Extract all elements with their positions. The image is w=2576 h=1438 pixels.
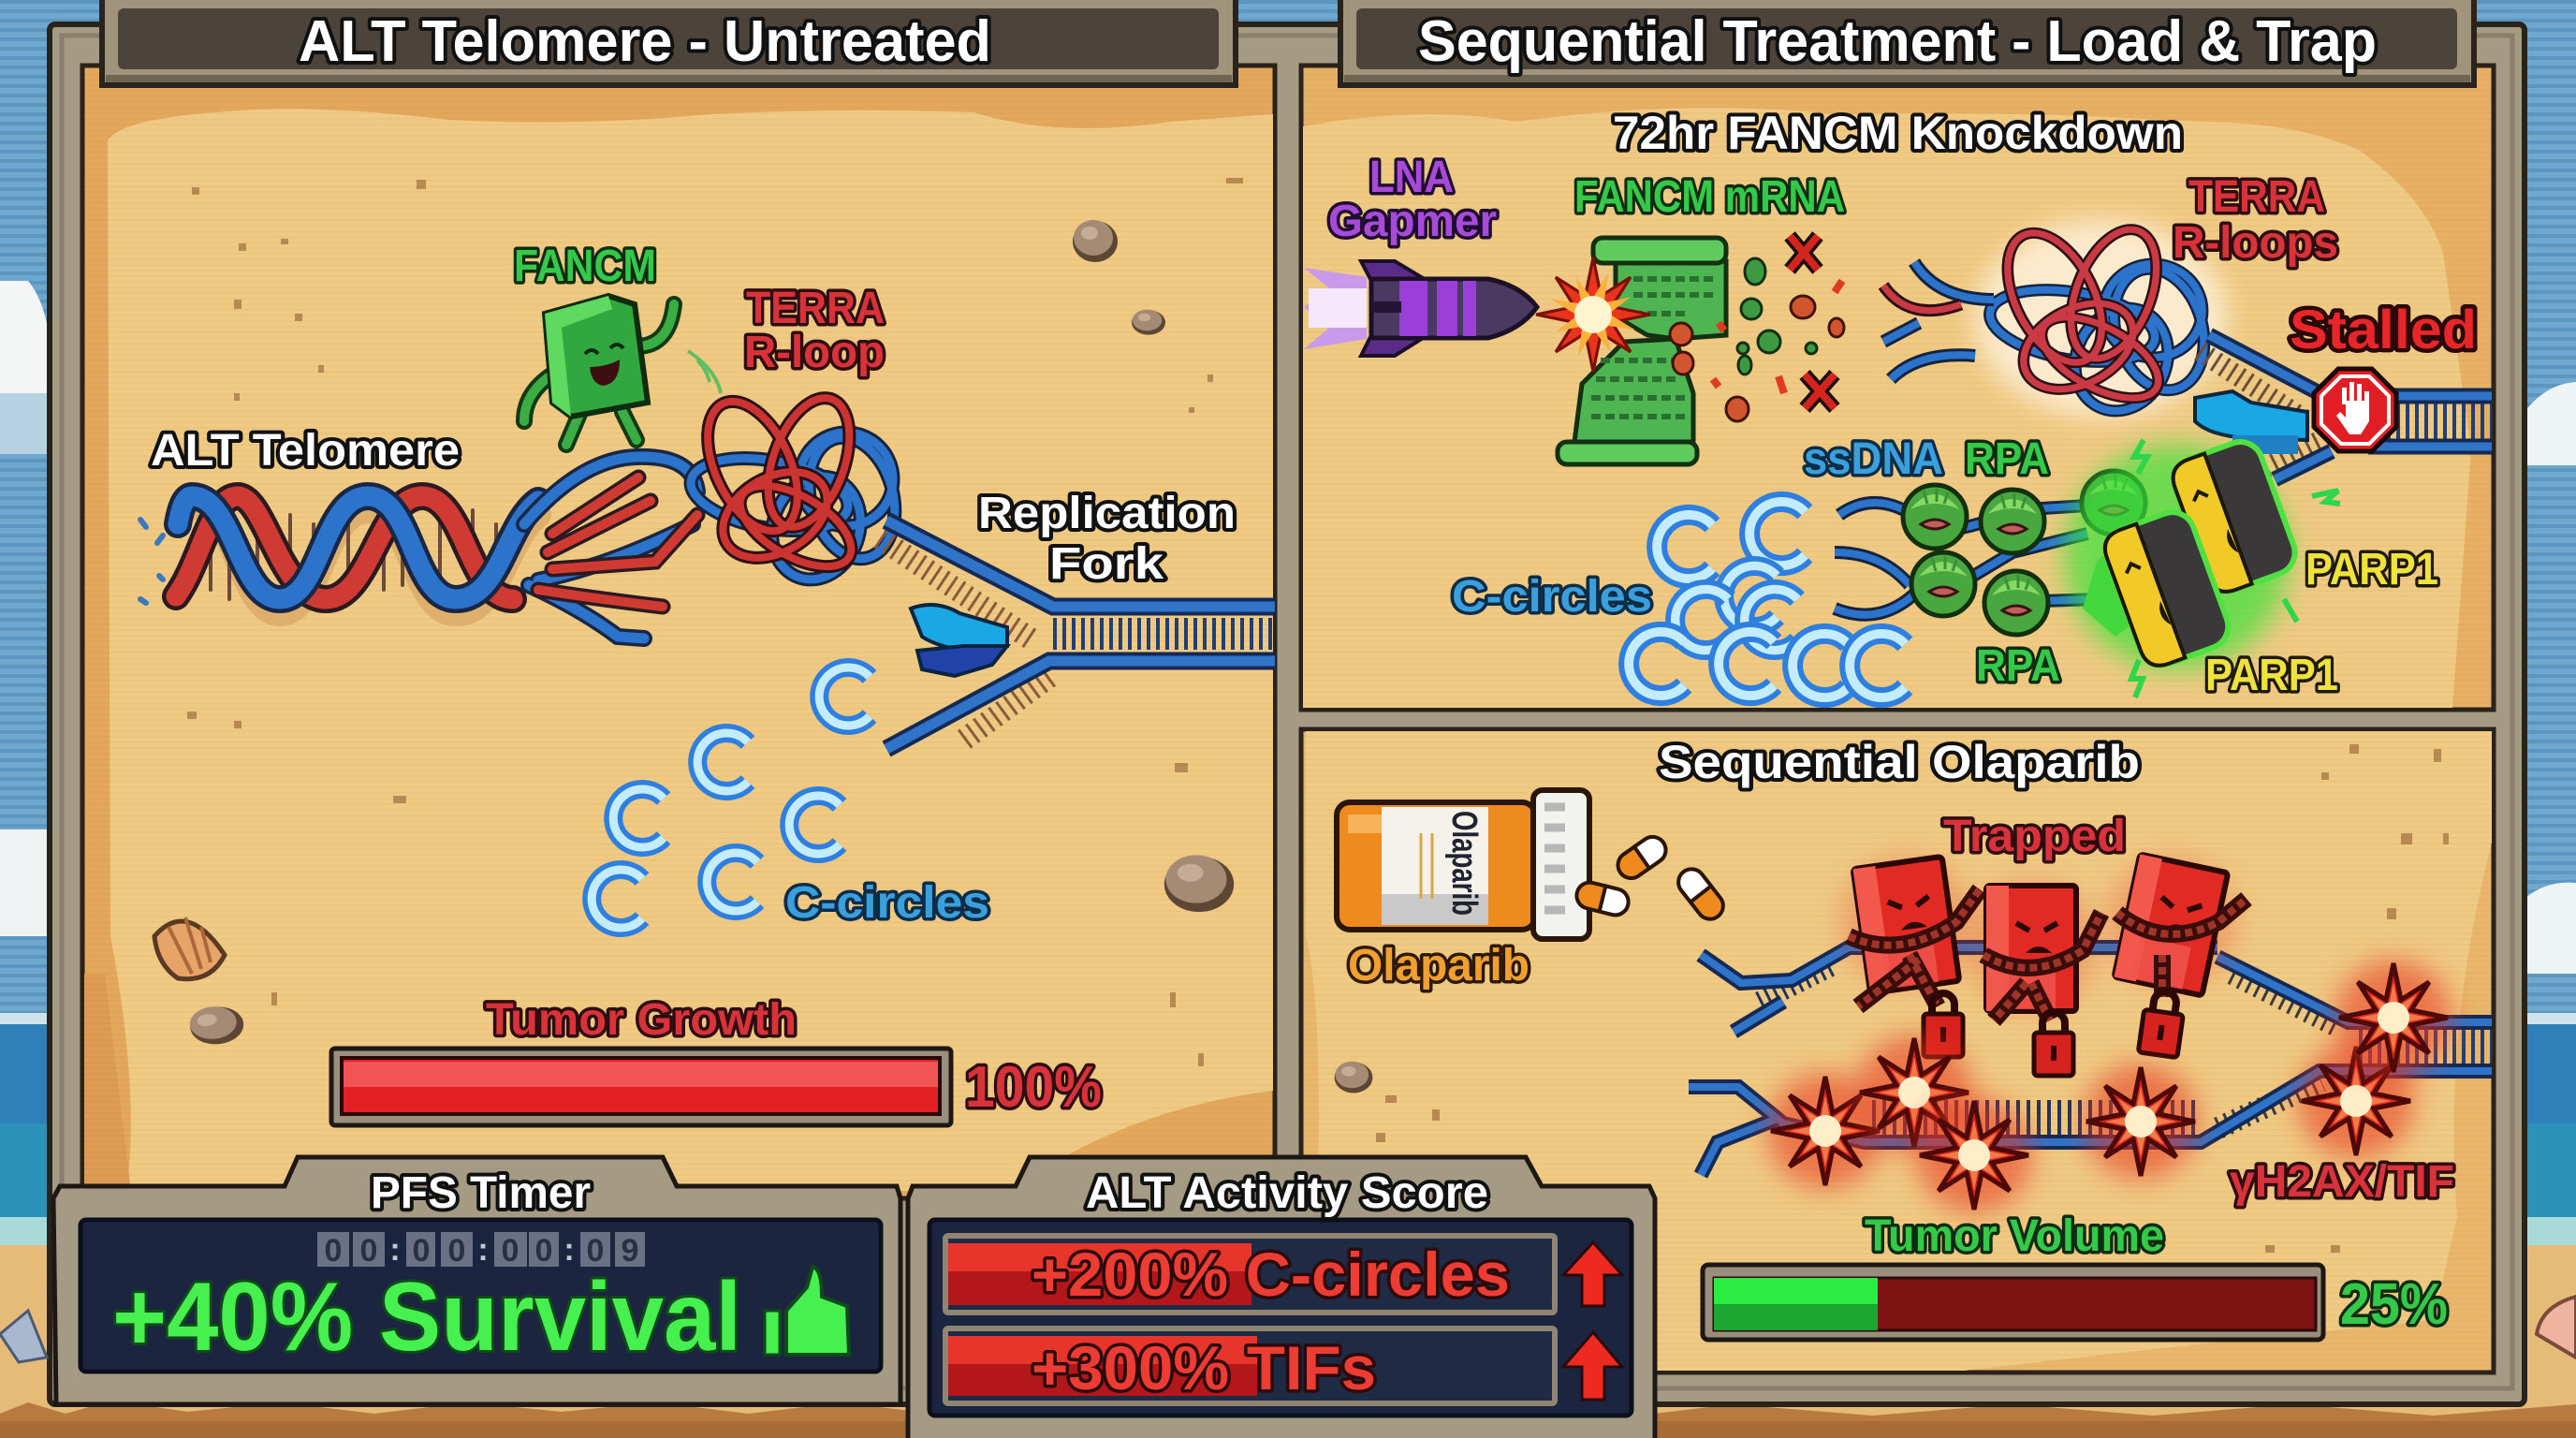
labels: left panel: FANCM xyxy=(514,242,656,291)
timer digits: : xyxy=(477,1232,489,1268)
labels: olaparib panel: Olaparib xyxy=(1348,941,1530,990)
broken and damaged DNA xyxy=(1689,947,2492,1175)
panel: PFS timer: PFS Timer xyxy=(371,1168,591,1218)
labels: knockdown panel: FANCM mRNA xyxy=(1574,172,1845,222)
decorative rock and shells: right xyxy=(0,1062,2576,1362)
header: right title xyxy=(1340,0,2474,85)
labels: left panel: R-loop xyxy=(744,328,885,377)
labels: left panel: ALT Telomere xyxy=(151,426,460,476)
panel: ALT activity score: ALT Activity Score xyxy=(1086,1168,1488,1218)
damage bursts: gamma H2AX foci xyxy=(1767,960,2452,1213)
gauge: tumor growth xyxy=(331,995,1102,1125)
icon: LNA gapmer rocket xyxy=(1304,261,1537,356)
c-circles, right panel xyxy=(1629,502,1905,697)
timer digits: 9 xyxy=(622,1233,638,1269)
tangle: TERRA R-loop xyxy=(685,387,908,592)
timer digits: 0 xyxy=(360,1233,377,1269)
labels: knockdown panel: ssDNA xyxy=(1804,434,1943,484)
labels: left panel: TERRA xyxy=(746,284,885,333)
labels: knockdown panel: PARP1 xyxy=(2205,651,2338,700)
arrow: up 2 xyxy=(1563,1332,1622,1400)
labels: left panel: Fork xyxy=(1049,539,1164,589)
icon: olaparib pill bottle xyxy=(1337,790,1729,939)
labels: knockdown panel: PARP1 xyxy=(2305,545,2438,594)
labels: olaparib panel xyxy=(1348,812,2454,1207)
labels: knockdown panel: R-loops xyxy=(2173,218,2338,268)
PARP1 proteins with green glow xyxy=(2064,435,2340,697)
arrow: up 1 xyxy=(1563,1242,1622,1306)
labels: knockdown panel: RPA xyxy=(1976,641,2060,691)
icon: x mark 1 xyxy=(1790,236,1818,270)
trapped PARP1 proteins with chains xyxy=(1840,854,2247,1076)
gauge: tumor growth: Tumor Growth xyxy=(486,995,797,1045)
tangle: TERRA R-loops with glow xyxy=(1883,218,2228,423)
header: left title xyxy=(102,0,1236,85)
panel: PFS timer xyxy=(53,1157,900,1404)
panel: left sand, untreated xyxy=(82,66,1275,1198)
timer digits: 0 xyxy=(587,1233,604,1269)
helix: ALT telomere xyxy=(140,496,538,613)
labels: knockdown panel: Gapmer xyxy=(1328,197,1497,246)
ssDNA strands with RPA xyxy=(1835,503,2097,615)
gauge: tumor volume: 25% xyxy=(2340,1272,2448,1337)
bar: C-circles: +200% C-circles xyxy=(1032,1240,1510,1309)
chains xyxy=(1849,889,2247,1020)
icon: pills xyxy=(1573,831,1729,924)
icon: explosion on mRNA xyxy=(1536,257,1650,372)
bar: TIFs xyxy=(945,1328,1555,1403)
timer digits: 0 xyxy=(448,1233,465,1269)
panel: PFS timer: +40% Survival xyxy=(112,1263,741,1372)
gauge: tumor volume xyxy=(1703,1211,2448,1340)
icon: stalled helicase xyxy=(2195,391,2307,454)
RPA proteins xyxy=(1903,471,2145,635)
timer digits: 0 xyxy=(325,1233,342,1269)
panel: ALT activity score xyxy=(908,1157,1655,1438)
labels: olaparib panel: γH2AX/TIF xyxy=(2230,1157,2454,1207)
replication fork, stalled xyxy=(2200,335,2492,479)
c-circles, left panel xyxy=(592,668,870,928)
timer digits: 0 xyxy=(413,1233,430,1269)
labels: knockdown panel: RPA xyxy=(1965,434,2049,484)
icon: olaparib pill bottle: Olaparib xyxy=(1444,811,1484,916)
timer digits: : xyxy=(389,1232,401,1268)
gauge: tumor volume: Tumor Volume xyxy=(1865,1211,2164,1261)
icon: helicase xyxy=(911,605,1007,676)
labels: knockdown panel: LNA xyxy=(1369,153,1454,202)
header: right title: Sequential Treatment - Load & Trap xyxy=(1418,9,2377,74)
section title: FANCM knockdown: 72hr FANCM Knockdown xyxy=(1613,107,2183,159)
padlocks xyxy=(1924,993,1963,1057)
labels: knockdown panel xyxy=(1328,153,2477,700)
frayed strands from helix into tangle xyxy=(524,457,697,638)
labels: knockdown panel: C-circles xyxy=(1452,572,1652,622)
labels: knockdown panel: TERRA xyxy=(2188,172,2325,222)
icon: stop sign xyxy=(2314,369,2396,451)
panel: right bottom sand, olaparib xyxy=(1301,729,2494,1372)
panel: right top sand, knockdown xyxy=(1301,66,2494,710)
bar: TIFs: +300% TIFs xyxy=(1032,1333,1376,1402)
mRNA fragments and X marks xyxy=(1670,236,1844,421)
header: left title: ALT Telomere - Untreated xyxy=(299,9,991,74)
timer digits xyxy=(317,1232,645,1269)
bar: C-circles xyxy=(945,1236,1555,1313)
PARP1 lower xyxy=(2100,506,2234,671)
icon: x mark 2 xyxy=(1805,374,1835,408)
decorative rocks and shells: left xyxy=(154,220,1234,1049)
section title: olaparib: Sequential Olaparib xyxy=(1659,736,2140,788)
icon: FANCM mRNA scroll xyxy=(1558,238,1726,464)
PARP1 upper xyxy=(2168,435,2301,597)
replication fork, left panel xyxy=(880,521,1275,749)
gauge: tumor growth: 100% xyxy=(965,1055,1102,1120)
timer digits: 0 xyxy=(535,1233,552,1269)
timer digits: : xyxy=(564,1232,575,1268)
labels: olaparib panel: Trapped xyxy=(1943,812,2126,861)
labels: left panel: Replication xyxy=(978,489,1236,538)
labels: left panel xyxy=(151,242,1236,928)
icon: FANCM character xyxy=(524,296,721,445)
labels: knockdown panel: Stalled xyxy=(2290,300,2477,360)
labels: left panel: C-circles xyxy=(785,878,989,928)
icon: thumbs up xyxy=(765,1267,849,1355)
timer digits: 0 xyxy=(502,1233,519,1269)
